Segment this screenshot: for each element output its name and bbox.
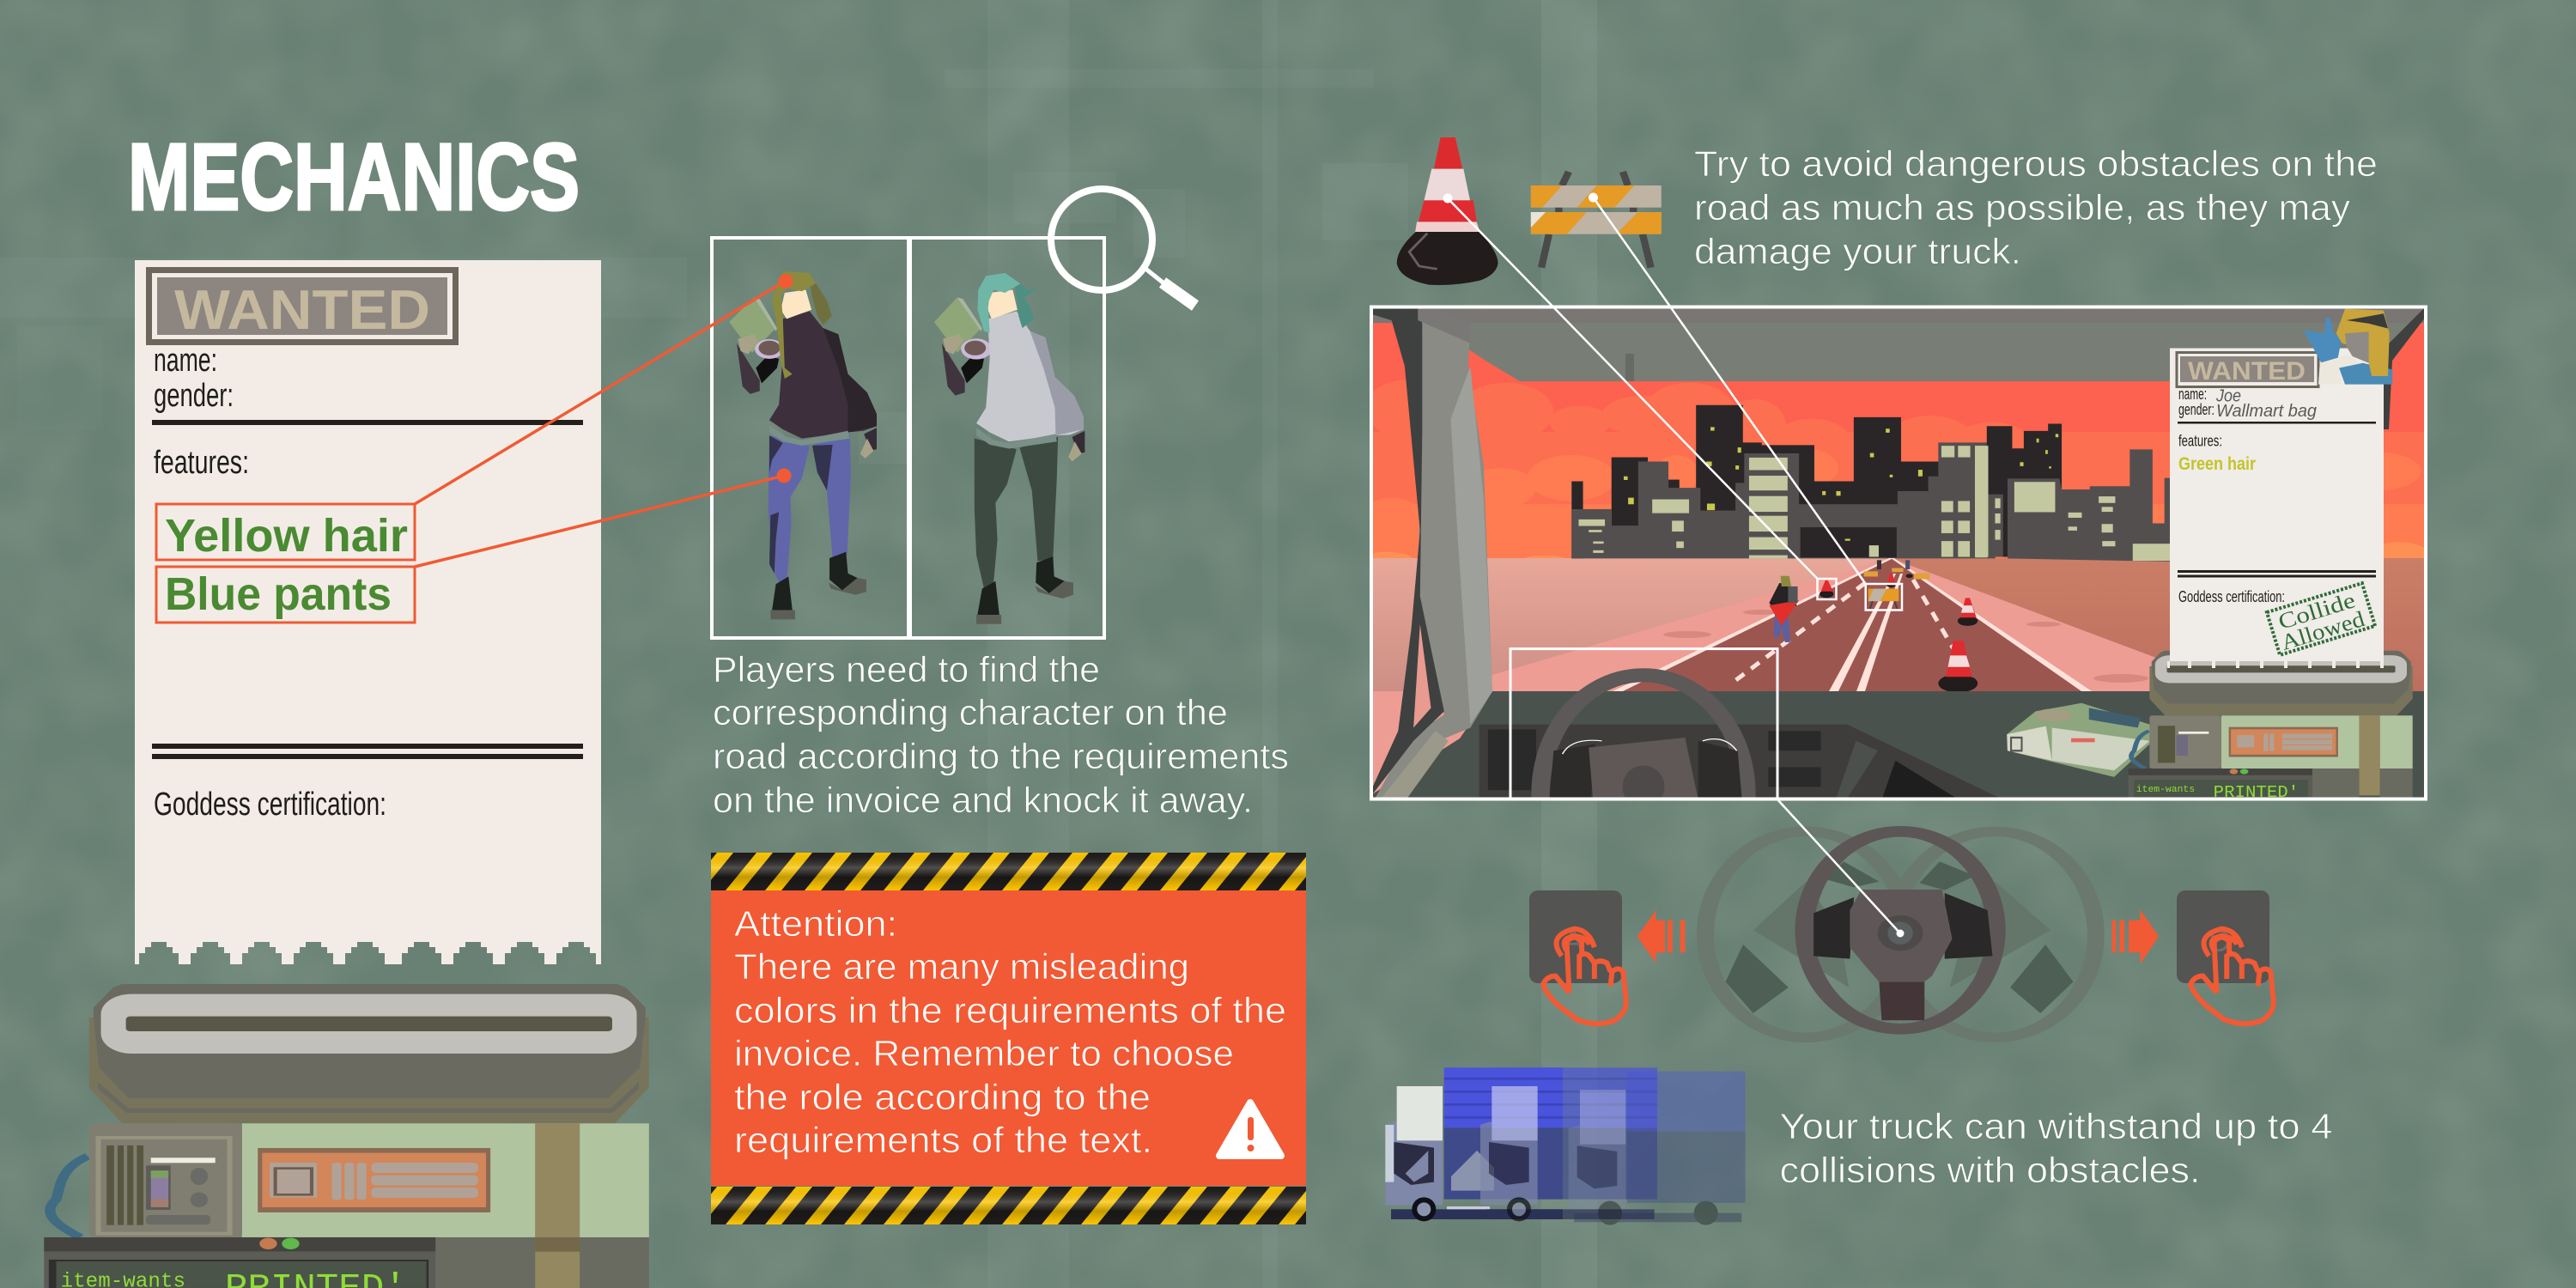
- wanted stamp: [149, 270, 455, 342]
- icon: pressing hand: [1543, 929, 1626, 1024]
- callout line: blue pants: [415, 469, 792, 567]
- typewriter device: [2007, 703, 2149, 777]
- leader: cone to road: [1443, 194, 1836, 599]
- steering wheel diagram: [1705, 831, 2096, 1037]
- panel: invoice receipt: [135, 260, 601, 964]
- icon: road barricade: [1531, 172, 1662, 268]
- mini printer: item-wants: [2136, 784, 2195, 795]
- ghost wheel left: [1705, 831, 1907, 1037]
- hazard stripe bottom: [711, 1187, 1306, 1224]
- attention text: colors in the requirements of the: [734, 990, 1286, 1030]
- icon: traffic cone: [1397, 137, 1498, 285]
- character: yellow hair, blue pants: [729, 271, 877, 619]
- text: truck durability: Your truck can withstand up to 4: [1779, 1106, 2332, 1146]
- right cabin edge: [2384, 307, 2425, 429]
- feature: blue pants: Blue pants: [165, 568, 392, 620]
- text: avoid obstacles: damage your truck.: [1694, 231, 2021, 271]
- printer: [44, 984, 649, 1288]
- game screenshot: [1373, 309, 2424, 797]
- highlight boxes and leader lines: [1443, 192, 1905, 938]
- mini name: name:: [2178, 386, 2207, 403]
- mini name value: Joe: [2215, 386, 2241, 405]
- ghost wheel right: [1894, 831, 2096, 1037]
- truck 3: [1569, 1072, 1746, 1225]
- icon: magnifier: [1051, 189, 1195, 306]
- stamp: collide allowed: Collide: [2275, 587, 2358, 635]
- features label: features:: [154, 445, 249, 481]
- hazard stripe top: [711, 853, 1306, 890]
- text: find the character: road according to the requirements: [713, 736, 1289, 776]
- attention background: [711, 890, 1306, 1186]
- arrow left: [1637, 910, 1685, 963]
- attention text: the role according to the: [734, 1077, 1151, 1117]
- stamp: collide allowed: [2267, 583, 2376, 657]
- windshield pillar: [1370, 306, 1492, 802]
- mini printer: PRINTED': [2214, 783, 2299, 802]
- arrow right: [2112, 909, 2159, 964]
- wanted stamp: WANTED: [174, 278, 430, 341]
- mini wanted stamp: [2177, 352, 2318, 386]
- panel: attention warning: [711, 853, 1306, 1224]
- text: truck durability: [1779, 1106, 2332, 1190]
- scene frame: [1371, 307, 2426, 799]
- mini certification: Goddess certification:: [2178, 588, 2285, 605]
- mini gender value: Wallmart bag: [2216, 402, 2317, 421]
- key cap D: D: [2208, 923, 2231, 958]
- ceiling: [1372, 307, 2425, 381]
- receipt paper: [135, 260, 601, 964]
- attention text: [734, 903, 1286, 1160]
- main wheel: [1805, 831, 1996, 1029]
- key D with hand: [2177, 890, 2274, 1024]
- steering wheel in cab: [1532, 668, 1755, 797]
- in-game invoice: [2167, 349, 2384, 668]
- mini features: features:: [2178, 433, 2222, 450]
- truck 2: [1480, 1067, 1657, 1221]
- ground: [1373, 558, 2424, 710]
- callout line: yellow hair: [415, 274, 793, 504]
- attention text: invoice. Remember to choose: [734, 1033, 1234, 1073]
- title: MECHANICS: [128, 125, 580, 230]
- text: find the character: [713, 649, 1289, 820]
- obstacles on road: [1820, 560, 1978, 693]
- goddess portrait: [2304, 309, 2392, 385]
- key A with hand: [1529, 890, 1626, 1024]
- skyline: [1571, 405, 2182, 562]
- key cap A: A: [1563, 923, 1583, 958]
- text: find the character: Players need to find the: [713, 649, 1100, 690]
- mini gender: gender:: [2178, 401, 2215, 418]
- character comparison panel: [415, 189, 1195, 638]
- mini printer: [2129, 651, 2413, 805]
- mini feature: green hair: Green hair: [2178, 454, 2256, 474]
- text: truck durability: collisions with obstacles.: [1779, 1150, 2200, 1190]
- road: [1373, 558, 2155, 793]
- icon: warning triangle: [1219, 1103, 1281, 1156]
- stamp: collide allowed: Allowed: [2278, 606, 2367, 655]
- certification label: Goddess certification:: [154, 787, 386, 823]
- text: avoid obstacles: road as much as possible, as they may: [1694, 187, 2350, 228]
- character on road: [1769, 576, 1799, 642]
- text: find the character: on the invoice and knock it away.: [713, 780, 1253, 820]
- truck collision sequence: [1385, 1067, 1746, 1225]
- text: find the character: corresponding character on the: [713, 692, 1228, 732]
- text: avoid obstacles: [1694, 143, 2378, 271]
- truck dashboard: [1372, 691, 2425, 799]
- name label: name:: [154, 343, 217, 379]
- mini wanted stamp: WANTED: [2188, 357, 2306, 386]
- attention text: requirements of the text.: [734, 1120, 1152, 1160]
- mini receipt paper: [2167, 349, 2384, 668]
- sky: [1373, 323, 2424, 558]
- leader: wheel: [1510, 649, 1905, 938]
- key cap D: [2177, 890, 2269, 983]
- text: avoid obstacles: Try to avoid dangerous obstacles on the: [1694, 143, 2378, 184]
- character: teal hair, grey hoodie: [934, 273, 1084, 624]
- frame: left character: [712, 238, 908, 638]
- truck 1: [1385, 1067, 1563, 1221]
- icon: pressing hand: [2190, 929, 2274, 1024]
- frame: right character: [910, 238, 1104, 638]
- attention text: There are many misleading: [734, 946, 1189, 987]
- leader: barricade to road: [1589, 192, 1902, 610]
- gender label: gender:: [154, 378, 234, 414]
- key cap A: [1529, 890, 1622, 983]
- feature: yellow hair: Yellow hair: [165, 510, 408, 562]
- attention text: Attention:: [734, 903, 897, 944]
